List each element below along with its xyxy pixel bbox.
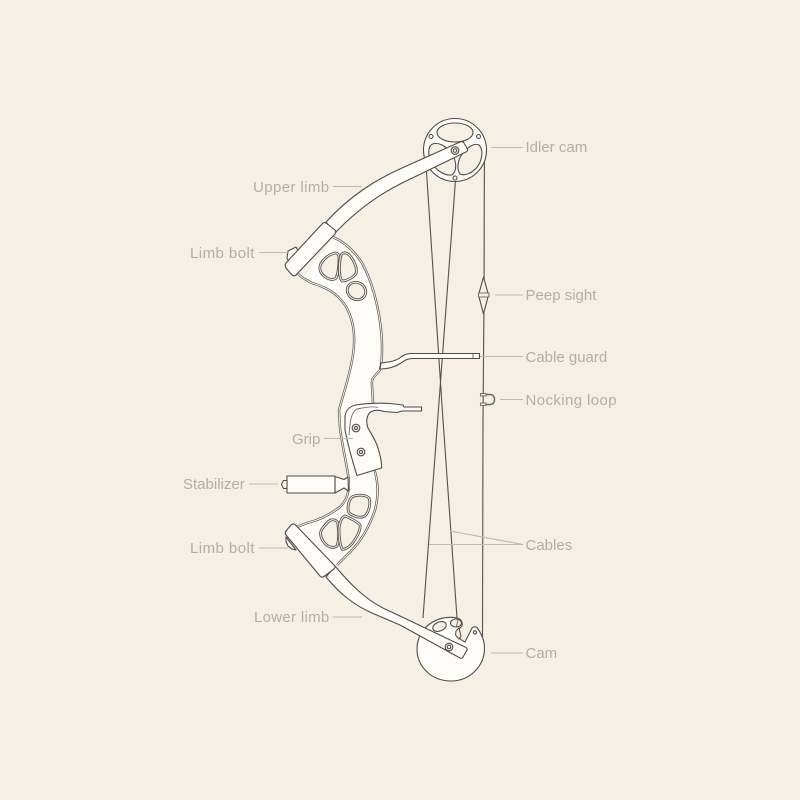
label: Upper limb: Upper limb	[253, 179, 330, 196]
label: Grip	[292, 431, 353, 448]
label: Cables: Cables	[526, 537, 572, 554]
lower limb bolt	[286, 537, 296, 550]
idler cam	[424, 118, 486, 182]
cam	[417, 617, 484, 681]
lower limb pocket	[285, 524, 335, 577]
lower limb	[326, 566, 467, 658]
cable guard	[380, 354, 480, 369]
label: Lower limb bolt: Limb bolt	[190, 540, 255, 557]
upper riser cutouts	[320, 253, 369, 303]
label: Peep sight: Peep sight	[526, 287, 597, 304]
label: Upper limb bolt: Limb bolt	[190, 245, 255, 262]
label: Grip: Grip	[292, 431, 320, 448]
riser	[295, 237, 382, 567]
cables	[423, 160, 457, 618]
peep sight	[478, 277, 489, 314]
label: Cable guard	[480, 349, 607, 366]
label: Stabilizer	[183, 476, 278, 493]
upper limb	[326, 142, 468, 233]
label: Lower limb bolt	[190, 540, 288, 557]
label: Peep sight	[495, 287, 597, 304]
stabilizer	[282, 476, 348, 493]
label: Idler cam	[491, 139, 587, 156]
label: Cable guard: Cable guard	[526, 349, 607, 366]
label: Cam	[491, 645, 557, 662]
bow string	[482, 152, 484, 640]
label: Cables	[429, 531, 572, 554]
lower riser cutouts	[321, 495, 370, 549]
grip and arrow shelf	[345, 403, 422, 476]
label: Stabilizer: Stabilizer	[183, 476, 245, 493]
upper limb pocket	[285, 223, 336, 276]
label: Upper limb bolt	[190, 245, 288, 262]
grip screws	[352, 424, 365, 456]
label: Lower limb	[254, 609, 362, 626]
nocking loop	[480, 394, 494, 406]
upper limb bolt	[287, 247, 302, 268]
label: Lower limb: Lower limb	[254, 609, 330, 626]
label: Idler cam: Idler cam	[526, 139, 587, 156]
label: Cam: Cam	[526, 645, 557, 662]
label: Nocking loop: Nocking loop	[526, 392, 617, 409]
